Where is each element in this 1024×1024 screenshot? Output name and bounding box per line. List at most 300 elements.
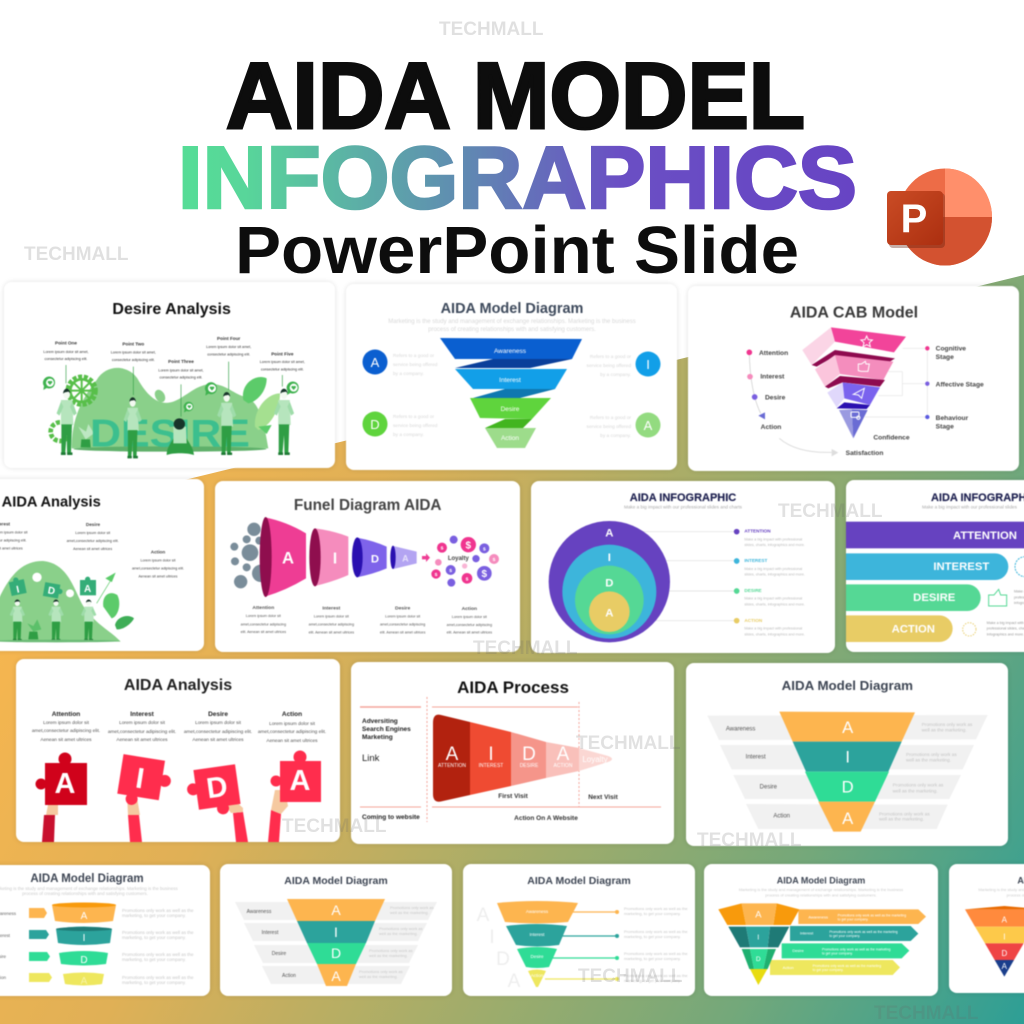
heading: AIDA Model Diagram xyxy=(284,875,388,887)
panel: AIDA Infographic, nested circles xyxy=(531,481,835,653)
point labels: Point Five xyxy=(271,351,294,356)
point labels: consectetur adipiscing elit. xyxy=(45,357,87,361)
legend: Make a big impact with professional xyxy=(744,597,802,601)
row notes: marketing, to get your company. xyxy=(624,978,681,983)
funnel: D xyxy=(331,945,341,961)
funnel: D xyxy=(1001,949,1007,958)
column text: Action xyxy=(151,549,165,554)
pyramid xyxy=(802,327,906,438)
left labels and path: Confidence xyxy=(873,434,910,441)
loyalty coins: $ xyxy=(482,569,488,580)
funnel: D xyxy=(842,777,854,796)
loyalty coins: $ xyxy=(449,568,452,574)
row labels: Awareness xyxy=(247,909,272,915)
arrow bands: Desire xyxy=(792,948,805,953)
left labels: Link xyxy=(362,753,380,764)
funnel: A xyxy=(842,718,854,737)
column text: Aenean sit amet ultrices xyxy=(192,737,244,743)
bars: ACTION xyxy=(892,623,935,635)
row notes xyxy=(879,722,973,822)
column text: Lorem ipsum dolor sit xyxy=(314,615,349,619)
arrow bands: to get your company. xyxy=(822,951,853,955)
loyalty coins: Loyalty xyxy=(448,556,469,562)
point labels: consectetur adipiscing elit. xyxy=(207,352,250,356)
funnel segments: A xyxy=(446,744,459,765)
description: process of creating relationships with and satisfying customers. xyxy=(22,891,148,896)
side notes xyxy=(393,353,631,439)
row notes: marketing, to get your company. xyxy=(122,980,186,985)
row notes xyxy=(122,908,194,985)
right labels and dots: Affective Stage xyxy=(936,381,984,388)
arrow bands: to get your company. xyxy=(813,968,844,972)
illustration: people holding puzzle letters xyxy=(0,561,134,642)
column text: Action xyxy=(462,606,477,612)
bars: ATTENTION xyxy=(953,530,1017,542)
watermarks: TECHMALL xyxy=(282,816,387,837)
row notes: marketing, to get your company. xyxy=(122,913,186,918)
row notes: Promotions only work as xyxy=(390,905,434,910)
funnel: Interest xyxy=(499,377,521,384)
left labels: Adversiting xyxy=(362,718,398,725)
column text: Interest xyxy=(130,711,155,718)
legend: INTEREST xyxy=(744,558,768,563)
watermarks: TECHMALL xyxy=(697,830,802,851)
description xyxy=(388,319,636,333)
row labels: Awareness xyxy=(726,726,755,732)
subtitle: Make a big impact with our professional slides xyxy=(922,505,1018,510)
row notes: well as the marketing. xyxy=(379,931,418,936)
column text: elit. Aenean sit amet ultrices xyxy=(241,630,286,634)
funnel segments: I xyxy=(488,744,494,765)
heading: AIDA Model Diagram xyxy=(30,873,144,885)
point labels: Lorem ipsum dolor sit amet, xyxy=(260,360,305,364)
right labels and dots xyxy=(925,346,984,431)
funnel xyxy=(965,906,1024,977)
point labels: Point Three xyxy=(168,359,194,364)
heading: AIDA INFOGRAPHIC xyxy=(630,492,736,504)
subtitle: Make a big impact with our professional slides and charts xyxy=(624,505,743,510)
row labels: Interest xyxy=(262,930,279,936)
row labels xyxy=(247,909,296,979)
arrow bands: to get your company. xyxy=(829,934,860,938)
column text: Lorem ipsum dolor sit xyxy=(246,614,281,618)
row notes: Promotions only work as well as the xyxy=(122,930,194,935)
funnel: A xyxy=(1002,962,1008,971)
column text: Action xyxy=(282,711,302,718)
column text xyxy=(32,711,326,744)
puzzle piece I xyxy=(116,754,174,811)
column text: Lorem ipsum dolor sit xyxy=(119,720,166,726)
heading: AIDA Model Diagram xyxy=(777,875,865,885)
legend: Make a big impact with professional xyxy=(744,537,802,541)
dots xyxy=(615,910,619,981)
side notes: service being offered xyxy=(393,423,438,429)
row notes: Promotions only work as xyxy=(369,948,413,953)
legend: slides, charts, infographics and more. xyxy=(744,573,805,577)
left labels xyxy=(362,718,420,821)
funnel: Interest xyxy=(529,932,545,937)
heading: AIDA Process xyxy=(457,678,569,697)
description: process of creating relationships with and satisfying customers. xyxy=(765,892,877,897)
left labels: Search Engines xyxy=(362,726,411,733)
watermarks: TECHMALL xyxy=(578,966,683,987)
right labels and dots: Stage xyxy=(936,424,954,431)
gradient background xyxy=(0,275,1024,1024)
panel: Desire Analysis xyxy=(4,282,335,468)
slide thumbnails xyxy=(0,282,1024,996)
loyalty coins: $ xyxy=(493,557,496,563)
legend: Make a big impact with professional xyxy=(744,627,802,631)
arrow bands: Promotions only work as well as the marketing xyxy=(838,914,906,918)
panel: AIDA Process xyxy=(351,662,674,844)
heading: Desire Analysis xyxy=(112,301,231,318)
point labels: consectetur adipiscing elit. xyxy=(160,376,202,380)
cylinders: I xyxy=(83,933,85,944)
side notes: by a company. xyxy=(393,371,424,377)
row labels: Desire xyxy=(760,784,778,790)
puzzle piece A: A xyxy=(55,768,76,800)
heading: AIDA Model Diagram xyxy=(527,875,631,887)
column text: amet,consectetur adipiscing elit. xyxy=(108,729,176,735)
legend: slides, charts, infographics and more. xyxy=(744,632,805,636)
arrow bands: Promotions only work as well as the marketing xyxy=(822,947,891,951)
arrow bands: Promotions only work as well as the marketing xyxy=(829,930,898,934)
funnel segments: DESIRE xyxy=(520,763,539,769)
legend: ACTION xyxy=(744,618,763,623)
connector lines xyxy=(628,532,737,621)
column text: elit. Aenean sit amet ultrices xyxy=(447,631,492,635)
row notes: well as the marketing. xyxy=(879,817,924,822)
heading: AIDA Analysis xyxy=(124,677,232,694)
faceted funnel xyxy=(718,903,799,985)
column text: Aenean sit amet ultrices xyxy=(73,547,112,551)
column text xyxy=(241,605,492,635)
bottom labels: Next Visit xyxy=(588,794,619,801)
column text: amet,consectetur adipiscing xyxy=(241,622,286,626)
column text: amet,consectetur adipiscing xyxy=(309,623,354,627)
row notes xyxy=(624,906,688,983)
side notes xyxy=(987,590,1024,636)
heading: AIDA Model Diagram xyxy=(782,678,913,693)
legend xyxy=(734,529,805,636)
left labels and path: Attention xyxy=(759,350,788,357)
funnel segments: ATTENTION xyxy=(438,763,466,769)
right labels and dots: Behaviour xyxy=(936,415,969,422)
watermarks: TECHMALL xyxy=(473,638,578,659)
funnel: Awareness xyxy=(494,348,527,355)
row notes: well as the marketing. xyxy=(922,728,967,733)
funnel segments: Loyalty xyxy=(582,755,608,764)
side notes: service being offered xyxy=(393,362,438,368)
connectors behind pyramid xyxy=(865,348,927,417)
circle badges: A xyxy=(371,355,380,370)
left labels and path: Interest xyxy=(760,374,785,381)
column text: amet,consectetur adipiscing elit. xyxy=(132,567,184,571)
title block xyxy=(178,43,857,288)
funnel segments xyxy=(433,715,612,802)
description: process of creating relationships with and satisfying customers. xyxy=(428,327,596,333)
column text: Aenean sit amet ultrices xyxy=(266,738,318,744)
faint letters: A xyxy=(508,971,521,992)
legend: slides, charts, infographics and more. xyxy=(744,543,805,547)
panel: AIDA Model Diagram, large funnel xyxy=(686,663,1008,846)
left labels: Coming to website xyxy=(362,814,420,821)
column text: Lorem ipsum dolor sit xyxy=(75,531,110,535)
row notes: well as the marketing. xyxy=(359,974,398,979)
puzzle piece D: D xyxy=(205,771,230,805)
funnel: Action xyxy=(501,435,519,442)
row labels: Interest xyxy=(746,755,766,761)
nested circles xyxy=(549,521,670,642)
bars xyxy=(846,522,1024,642)
side notes: by a company. xyxy=(600,433,631,439)
left labels and path xyxy=(746,349,910,457)
faceted funnel: A xyxy=(755,909,762,919)
point labels: Point One xyxy=(55,341,77,346)
row notes xyxy=(359,905,434,979)
description: Marketing is the study and management of exchange relationships. Marketing is the business xyxy=(388,319,636,325)
puzzle piece A xyxy=(270,750,321,802)
side notes: service being offered xyxy=(587,363,631,369)
funnel segments: ACTION xyxy=(554,763,573,769)
illustration: people holding puzzle letters: A xyxy=(84,584,91,595)
faceted funnel: D xyxy=(756,956,761,963)
icon: PowerPoint logo xyxy=(887,168,992,266)
description: Marketing is the study and management of exchange relationships. Marketing is the business xyxy=(739,887,903,892)
panel: AIDA CAB Model xyxy=(688,286,1019,471)
legend: DESIRE xyxy=(744,588,762,593)
funnel: A xyxy=(842,809,854,828)
point labels: Lorem ipsum dolor sit amet, xyxy=(111,351,156,355)
loyalty coins: $ xyxy=(441,546,444,552)
funnel segments: D xyxy=(522,744,536,765)
nested circles: A xyxy=(605,608,613,620)
panel: AIDA Analysis, green puzzle scene xyxy=(0,479,204,651)
row labels xyxy=(0,911,17,980)
column text: amet,consectetur adipiscing xyxy=(380,623,425,627)
icon: PowerPoint logo: P xyxy=(901,197,927,241)
row notes: well as the marketing. xyxy=(369,953,408,958)
loyalty coins: $ xyxy=(483,546,486,552)
circle badges: A xyxy=(644,418,653,433)
column text: Lorem ipsum dolor sit xyxy=(141,559,175,563)
watermarks: TECHMALL xyxy=(576,733,681,754)
side notes: Refers to a good or xyxy=(393,353,434,359)
row notes: marketing, to get your company. xyxy=(122,957,186,962)
panel: AIDA Model Diagram, blue funnel xyxy=(346,284,677,470)
left labels and path: Satisfaction xyxy=(846,450,883,457)
bottom labels: First Visit xyxy=(498,793,529,800)
arrow bands: to get your company. xyxy=(838,918,869,922)
funnel: Awareness xyxy=(526,909,549,914)
row labels: Desire xyxy=(272,951,286,957)
column text xyxy=(0,522,184,579)
loyalty coins xyxy=(431,536,499,587)
row notes: Promotions only work as well as the xyxy=(122,975,194,980)
row notes: Promotions only work as well as the xyxy=(624,906,688,911)
funnel xyxy=(497,901,578,987)
heading: Funel Diagram AIDA xyxy=(294,497,441,514)
row notes: marketing, to get your company. xyxy=(624,911,681,916)
row notes: Promotions only work as xyxy=(879,811,930,816)
funnel cones: A xyxy=(402,553,409,563)
loyalty coins: $ xyxy=(466,540,472,551)
funnel cones: D xyxy=(371,554,379,566)
funnel: A xyxy=(331,968,341,984)
row notes: Promotions only work as xyxy=(893,783,944,788)
puzzle piece I: I xyxy=(133,763,146,795)
loyalty coins: $ xyxy=(435,572,438,578)
column text: amet,consectetur adipiscing elit. xyxy=(258,729,326,735)
puzzle piece A: A xyxy=(290,765,311,797)
column text: Lorem ipsum dolor sit xyxy=(452,615,487,619)
side notes: Refers to a good or xyxy=(590,415,631,421)
grey rows xyxy=(235,902,437,984)
row notes: Promotions only work as xyxy=(922,722,973,727)
nested circles: I xyxy=(608,552,611,564)
arrow bands: Interest xyxy=(800,931,814,936)
point labels: Lorem ipsum dolor sit amet, xyxy=(158,368,204,372)
title line: AIDA MODEL: AIDA MODEL xyxy=(226,43,805,148)
heading: AIDA Model Diagram xyxy=(441,301,583,317)
row notes: well as the marketing. xyxy=(906,758,951,763)
panel: AIDA Model Diagram, small funnel xyxy=(220,864,452,996)
row notes: well as the marketing. xyxy=(893,789,938,794)
stage icons xyxy=(851,336,872,419)
funnel xyxy=(779,712,915,832)
funnel cones: A xyxy=(282,548,294,567)
column text: Lorem ipsum dolor sit xyxy=(43,720,90,726)
right labels and dots: Stage xyxy=(936,354,954,361)
heading: AIDA CAB Model xyxy=(790,304,918,321)
watermarks: TECHMALL xyxy=(439,19,544,40)
side notes: Refers to a good or xyxy=(393,414,434,420)
funnel cones xyxy=(260,517,417,597)
column text: Attention xyxy=(52,711,80,718)
column text: Desire xyxy=(86,522,101,527)
left labels and path: Desire xyxy=(765,395,786,402)
description xyxy=(0,886,179,896)
arms xyxy=(42,790,288,842)
loyalty coins: $ xyxy=(466,576,469,582)
cylinders xyxy=(52,902,116,987)
panel: Funel Diagram AIDA xyxy=(215,481,520,652)
row notes: marketing, to get your company. xyxy=(122,935,186,940)
side notes: by a company. xyxy=(600,372,631,378)
puzzle piece A xyxy=(36,752,87,805)
icons xyxy=(963,557,1024,636)
point labels: consectetur adipiscing elit. xyxy=(112,358,155,362)
watermarks: TECHMALL xyxy=(24,244,129,265)
grey rows xyxy=(707,715,988,829)
funnel: Desire xyxy=(501,406,520,413)
faint letters xyxy=(477,905,521,992)
arrow bands: Awareness xyxy=(808,914,828,919)
watermarks: TECHMALL xyxy=(778,501,883,522)
panel: AIDA Model Diagram, rounded funnel xyxy=(463,864,695,996)
puzzle piece D xyxy=(185,764,242,819)
column text: Aenean sit amet ultrices xyxy=(138,575,178,579)
circle badges: I xyxy=(646,357,650,372)
funnel: A xyxy=(1002,916,1008,925)
funnel: Action xyxy=(531,973,544,978)
bars: DESIRE xyxy=(913,592,956,604)
funnel xyxy=(287,899,385,986)
funnel: Desire xyxy=(530,954,544,959)
side notes: Infographics and more. xyxy=(987,632,1024,636)
row notes: Promotions only work as well as the xyxy=(122,952,194,957)
funnel: A xyxy=(331,902,341,918)
arrow bands xyxy=(770,909,926,975)
row notes: Promotions only work as well as the xyxy=(624,973,688,978)
tags xyxy=(29,908,52,982)
column text: Aenean sit amet ultrices xyxy=(116,737,168,743)
panel: AIDA Analysis, puzzle pieces xyxy=(16,659,340,842)
column text: amet,consectetur adipiscing elit. xyxy=(184,729,252,735)
cylinders: A xyxy=(81,911,88,922)
legend: slides, charts, infographics and more. xyxy=(744,602,805,606)
watermarks: TECHMALL xyxy=(874,1003,979,1024)
circle badges xyxy=(362,350,660,438)
column text: Interest xyxy=(322,606,341,612)
panel: AIDA Model Diagram, cylinders xyxy=(0,865,210,996)
point labels: Lorem ipsum dolor sit amet, xyxy=(43,350,89,354)
guide arrows xyxy=(360,697,661,822)
column text: Desire xyxy=(395,606,411,612)
circle badges: D xyxy=(370,417,380,432)
panel: AIDA Infographic, stacked bars xyxy=(846,480,1024,652)
column text: amet,consectetur adipiscing xyxy=(447,623,492,627)
nested circles: A xyxy=(605,527,613,539)
legend: ATTENTION xyxy=(744,529,771,534)
point labels xyxy=(43,336,305,380)
funnel: I xyxy=(334,924,338,940)
column text: Aenean sit amet ultrices xyxy=(40,737,92,743)
row notes: marketing, to get your company. xyxy=(624,934,681,939)
description xyxy=(739,887,903,897)
side notes: service being offered xyxy=(587,424,631,430)
row labels: Action xyxy=(773,814,790,820)
arrow to loyalty xyxy=(422,553,430,562)
side notes: by a company. xyxy=(393,432,424,438)
column text: Attention xyxy=(252,605,274,611)
grey particles xyxy=(230,523,269,588)
column text: elit. Aenean sit amet ultrices xyxy=(380,630,426,634)
column text: Desire xyxy=(208,711,228,718)
column text: Lorem ipsum dolor sit xyxy=(195,720,242,726)
cylinders: D xyxy=(80,955,88,966)
title line: PowerPoint Slide: PowerPoint Slide xyxy=(235,213,799,288)
faint letters: I xyxy=(489,927,495,948)
connector lines xyxy=(545,912,617,979)
nested circles: D xyxy=(605,578,613,590)
bottom labels: Action On A Website xyxy=(514,815,578,822)
row notes: Promotions only work as xyxy=(359,969,403,974)
bars: INTEREST xyxy=(933,561,989,573)
illustration: people holding puzzle letters: D xyxy=(47,585,56,598)
panel: AIDA Model Diagram, faceted funnel with arrows xyxy=(704,864,938,996)
funnel segments: INTEREST xyxy=(479,763,503,769)
column text: Lorem ipsum dolor sit xyxy=(269,721,316,727)
funnel cones: I xyxy=(333,550,337,567)
funnel xyxy=(440,338,582,448)
description xyxy=(978,887,1024,897)
illustration: people holding puzzle letters: I xyxy=(15,584,21,596)
bottom labels xyxy=(498,793,619,822)
point labels: Lorem ipsum dolor sit amet, xyxy=(206,345,251,349)
faint letters: D xyxy=(496,949,510,970)
row notes: marketing, to get your company. xyxy=(624,956,681,961)
